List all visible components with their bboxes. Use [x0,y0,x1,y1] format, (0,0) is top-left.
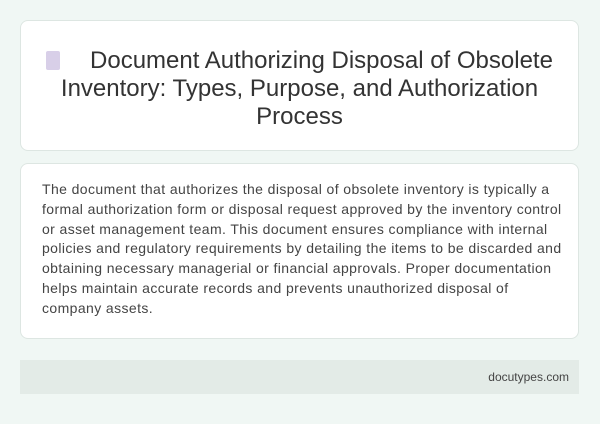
title: Document Authorizing Disposal of Obsolete Inventory: Types, Purpose, and Authorization Process [61,47,553,130]
description text: The document that authorizes the disposal of obsolete inventory is typically a formal authorization form or disposal request approved by the inventory control or asset management team. This document ensures compliance with internal policies and regulatory requirements by detailing the items to be discarded and obtaining necessary managerial or financial approvals. Proper documentation helps maintain accurate records and prevents unauthorized disposal of company assets. [42,181,562,316]
icon: document [46,51,60,70]
title panel [20,20,579,151]
footer source: docutypes.com [488,370,569,384]
description panel [20,163,579,339]
footer bar [20,360,579,394]
